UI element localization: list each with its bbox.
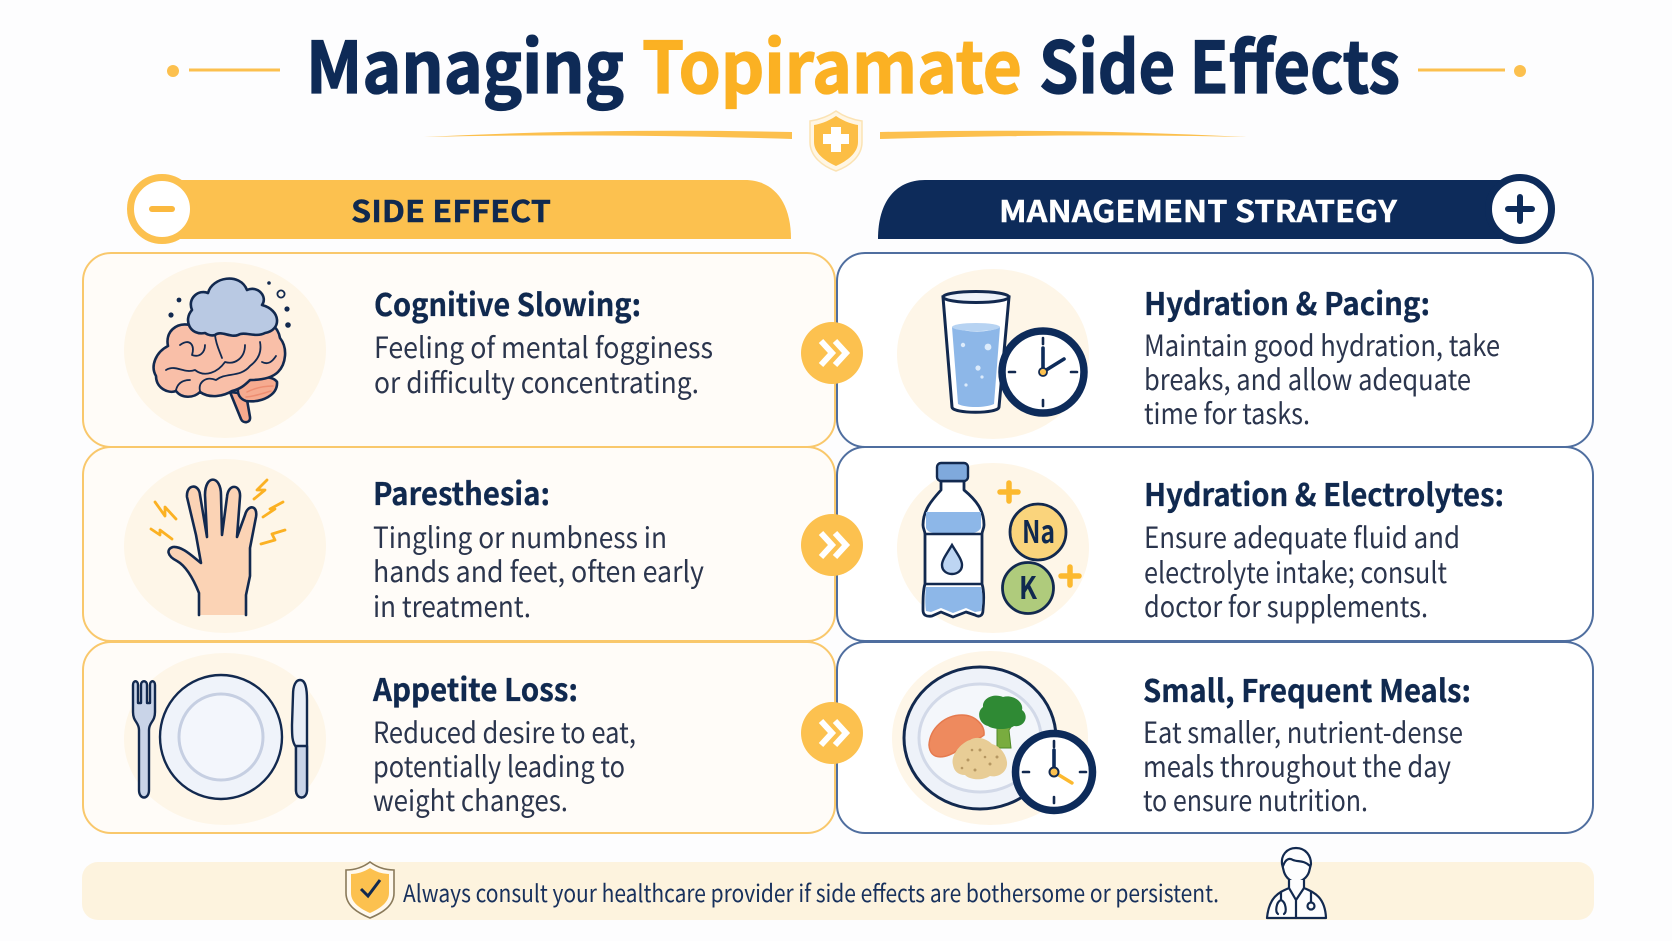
title underline swoosh: left	[424, 131, 792, 139]
header: side effect	[130, 178, 791, 240]
text: small frequent meals description	[1143, 710, 1463, 820]
icon: water bottle with Na and K	[923, 463, 1079, 617]
panel: hydration and pacing	[837, 253, 1593, 447]
text: appetite loss description: Reduced desire to eat,	[373, 710, 636, 752]
panel: hydration and electrolytes	[837, 447, 1593, 641]
heading: paresthesia: Paresthesia:	[373, 469, 550, 514]
heading: hydration and electrolytes: Hydration & Electrolytes:	[1144, 470, 1504, 515]
header: management strategy	[878, 178, 1552, 240]
icon: water bottle with Na and K: K	[1019, 563, 1038, 608]
panel: cognitive slowing	[83, 253, 835, 447]
icon: water glass and clock	[943, 292, 1084, 413]
text: hydration and pacing description: Maintain good hydration, take	[1144, 323, 1500, 365]
text: paresthesia description: hands and feet, often early	[373, 549, 704, 591]
heading: hydration and pacing: Hydration & Pacing:	[1144, 279, 1430, 324]
title: Side Effects	[1039, 12, 1400, 114]
title underline swoosh: right	[880, 131, 1247, 139]
icon: tingling hand	[151, 480, 285, 615]
icon: doctor	[1267, 848, 1326, 918]
text: hydration and electrolytes description: doctor for supplements.	[1144, 584, 1428, 626]
text: appetite loss description: weight changes.	[373, 778, 568, 820]
title ornament: right	[1418, 65, 1526, 77]
header label: side effect: SIDE EFFECT	[351, 187, 551, 231]
text: appetite loss description	[373, 710, 636, 820]
text: paresthesia description	[373, 515, 704, 626]
icon: meal plate and clock	[904, 667, 1092, 810]
title	[306, 12, 1400, 114]
icon: shield with check	[346, 862, 394, 918]
text: hydration and pacing description: breaks, and allow adequate	[1144, 357, 1471, 399]
title: Managing	[306, 12, 624, 114]
header label: management strategy: MANAGEMENT STRATEGY	[999, 187, 1398, 231]
text: hydration and electrolytes description: electrolyte intake; consult	[1144, 550, 1447, 592]
panel: paresthesia	[83, 447, 835, 641]
text: paresthesia description: Tingling or numbness in	[373, 515, 667, 557]
text: paresthesia description: in treatment.	[373, 584, 531, 626]
panel: appetite loss	[83, 642, 835, 833]
title: Topiramate	[642, 12, 1022, 114]
arrow: row 1	[801, 322, 863, 384]
heading: small frequent meals: Small, Frequent Meals:	[1143, 666, 1471, 711]
text: small frequent meals description: Eat smaller, nutrient-dense	[1143, 710, 1463, 752]
text: hydration and pacing description	[1144, 323, 1500, 433]
heading: appetite loss: Appetite Loss:	[372, 665, 578, 710]
title ornament: left	[167, 65, 280, 77]
text: small frequent meals description: to ensure nutrition.	[1143, 778, 1368, 820]
text: hydration and electrolytes description	[1144, 515, 1460, 626]
text: cognitive slowing description: Feeling of mental fogginess	[374, 325, 713, 367]
icon: shield with plus	[810, 111, 862, 171]
arrow: row 3	[801, 702, 863, 764]
panel: small frequent meals	[837, 642, 1593, 833]
icon: plus in ring	[1488, 178, 1552, 240]
text: cognitive slowing description: or difficulty concentrating.	[374, 360, 699, 402]
arrow: row 2	[801, 514, 863, 576]
text: cognitive slowing description	[374, 325, 713, 402]
icon: minus in ring	[130, 178, 194, 240]
text: hydration and electrolytes description: Ensure adequate fluid and	[1144, 515, 1460, 557]
text: appetite loss description: potentially leading to	[373, 744, 625, 786]
text: consult reminder: Always consult your healthcare provider if side effects are bothersome or persistent.	[403, 874, 1219, 909]
icon: foggy brain	[154, 279, 291, 422]
footer banner	[82, 848, 1594, 920]
icon: water bottle with Na and K: Na	[1022, 507, 1055, 552]
icon: empty plate with cutlery	[133, 675, 307, 799]
heading: cognitive slowing: Cognitive Slowing:	[374, 280, 641, 325]
text: small frequent meals description: meals throughout the day	[1143, 744, 1451, 786]
text: hydration and pacing description: time for tasks.	[1144, 391, 1310, 433]
